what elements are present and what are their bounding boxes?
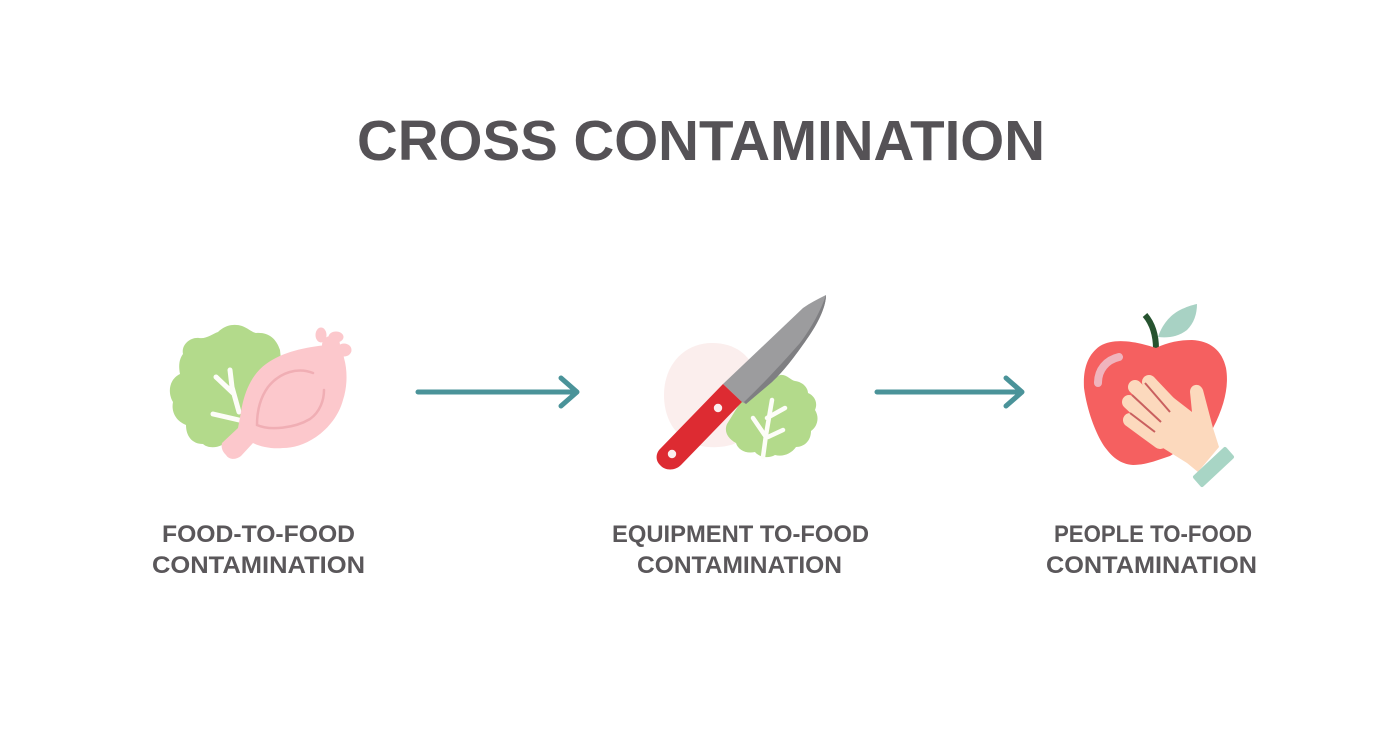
palm and thumb <box>1137 385 1219 472</box>
label: equipment to-food: CONTAMINATION <box>637 552 842 579</box>
apple body <box>1084 340 1227 465</box>
label: people to-food <box>1046 521 1257 579</box>
label: people to-food: CONTAMINATION <box>1046 552 1257 579</box>
fingers <box>1129 382 1185 442</box>
apple leaf <box>1158 304 1197 337</box>
pale food <box>664 343 755 447</box>
label: equipment to-food: EQUIPMENT TO-FOOD <box>612 521 869 548</box>
handle rivets <box>668 404 722 458</box>
apple highlight <box>1098 357 1119 383</box>
label: people to-food: PEOPLE TO-FOOD <box>1054 521 1252 548</box>
label: food-to-food: FOOD-TO-FOOD <box>162 521 355 548</box>
lettuce veins <box>753 400 785 457</box>
label: equipment to-food <box>612 521 869 579</box>
lettuce veins <box>213 370 239 420</box>
raw food inner curve <box>257 371 324 428</box>
icon: lettuce and raw food <box>170 325 352 459</box>
panel: equipment to-food <box>612 295 869 579</box>
arrow: equipment to people <box>877 378 1022 406</box>
panel: food-to-food <box>152 325 365 579</box>
lettuce leaf <box>170 325 285 447</box>
lettuce leaf <box>726 375 818 457</box>
finger gaps <box>1130 383 1170 432</box>
icon: knife and food <box>657 295 826 470</box>
knife blade edge <box>744 295 826 404</box>
icon: hand on apple <box>1084 304 1232 485</box>
cuff <box>1195 449 1232 485</box>
arrow: food to equipment <box>418 378 577 406</box>
title: CROSS CONTAMINATION <box>357 109 1045 173</box>
label: food-to-food: CONTAMINATION <box>152 552 365 579</box>
knife handle <box>657 384 742 470</box>
knife blade <box>723 295 826 404</box>
raw food top knob <box>316 328 352 356</box>
raw food body <box>222 345 347 459</box>
apple stem <box>1145 315 1156 349</box>
hand <box>1129 382 1219 472</box>
panel: people to-food <box>1046 304 1257 579</box>
label: food-to-food <box>152 521 365 579</box>
